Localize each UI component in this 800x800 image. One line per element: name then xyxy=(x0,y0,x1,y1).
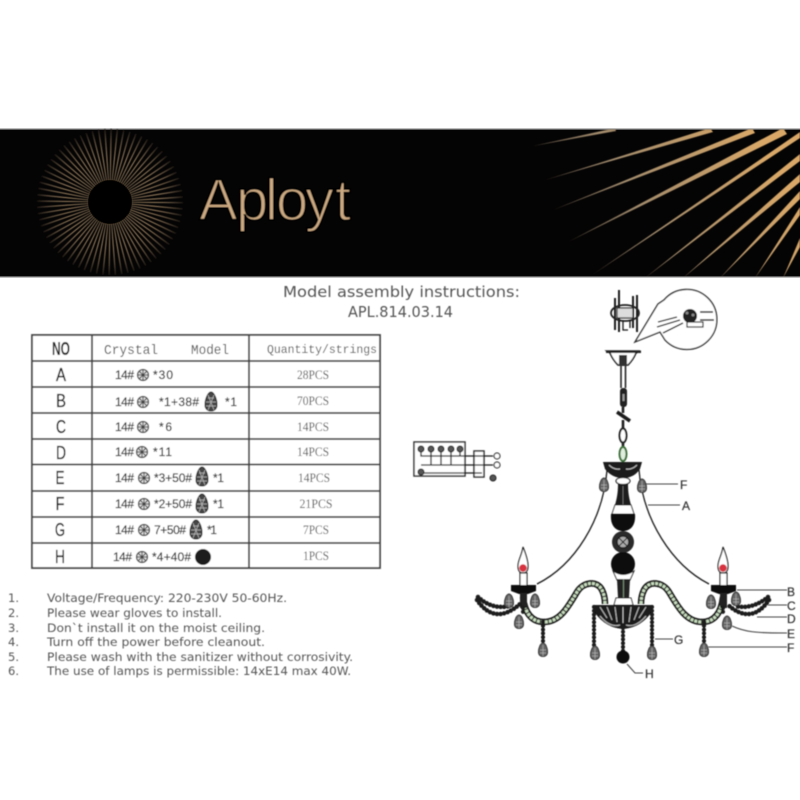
instructions list: Please wash with the sanitizer without corrosivity. xyxy=(47,650,353,664)
table header: Model xyxy=(191,343,229,359)
row G xyxy=(55,520,329,540)
row C xyxy=(56,417,329,437)
central column xyxy=(603,462,642,605)
heading: model assembly instructions: APL.814.03.14 xyxy=(348,303,453,321)
part callouts: B xyxy=(787,585,795,599)
instructions list: Voltage/Frequency: 220-230V 50-60Hz. xyxy=(47,591,287,605)
row G: G xyxy=(55,520,65,540)
heading: model assembly instructions: Model assembly instructions: xyxy=(283,283,520,301)
row H: H xyxy=(55,547,65,567)
bowl xyxy=(593,605,653,629)
glass arms xyxy=(523,583,723,622)
row G: 7+50# xyxy=(154,523,186,537)
crystal table xyxy=(32,335,380,568)
instructions list: 3. xyxy=(8,621,19,635)
row C: 14# xyxy=(115,420,134,434)
ball H xyxy=(616,650,630,664)
instructions list: 1. xyxy=(8,591,19,605)
row H xyxy=(55,547,329,567)
row F: *1 xyxy=(213,497,224,511)
instructions list: Don`t install it on the moist ceiling. xyxy=(47,621,265,635)
icon: golden sunburst logo xyxy=(63,155,157,249)
instructions list: 2. xyxy=(8,606,19,620)
row D: *11 xyxy=(153,445,172,459)
instructions list: Please wear gloves to install. xyxy=(47,606,222,620)
row A: *30 xyxy=(153,368,173,382)
row H: 14# xyxy=(113,550,132,564)
part callouts: E xyxy=(787,627,795,641)
part callouts: A xyxy=(682,499,690,513)
row A: 14# xyxy=(115,368,134,382)
row B: 14# xyxy=(115,395,134,409)
mounting detail inset xyxy=(611,289,717,349)
crystal drops xyxy=(504,478,740,660)
row E: *1 xyxy=(213,471,224,485)
part callouts: C xyxy=(787,599,796,613)
bead swags xyxy=(477,597,769,614)
row G: 7PCS xyxy=(303,523,329,537)
row D: D xyxy=(56,443,66,463)
support rods xyxy=(537,470,709,584)
instructions list: Turn off the power before cleanout. xyxy=(46,635,265,649)
instructions list: 6. xyxy=(8,664,19,678)
part callouts xyxy=(627,478,796,681)
heading: model assembly instructions xyxy=(283,283,520,321)
table header: Crystal xyxy=(104,343,158,359)
row C: C xyxy=(56,417,66,437)
right candle xyxy=(711,547,736,608)
row B: *1+38# xyxy=(159,395,199,409)
magnifier bubble xyxy=(635,289,717,349)
bead strands xyxy=(523,607,723,652)
row F: 14# xyxy=(115,497,134,511)
row F xyxy=(56,494,333,514)
row D xyxy=(56,443,329,463)
table header xyxy=(52,339,377,359)
row B: 70PCS xyxy=(297,394,329,408)
part callouts: F xyxy=(787,641,794,655)
row E: E xyxy=(56,468,64,488)
ceiling cup and chain xyxy=(606,350,641,463)
chandelier drawing xyxy=(477,350,769,664)
wiring diagram xyxy=(414,442,500,481)
row G: 14# xyxy=(115,523,134,537)
row E xyxy=(56,467,330,488)
row H: *4+40# xyxy=(152,550,191,564)
brand name: Aployt xyxy=(199,168,351,233)
part callouts: D xyxy=(787,612,796,626)
row H: 1PCS xyxy=(303,549,329,563)
part callouts: H xyxy=(645,667,654,681)
row F: 21PCS xyxy=(300,497,333,511)
decorative golden rays xyxy=(533,128,800,278)
row E: *3+50# xyxy=(154,471,192,485)
row F: *2+50# xyxy=(154,497,192,511)
table header: NO xyxy=(52,339,70,359)
left candle xyxy=(511,547,536,608)
row B xyxy=(56,391,329,411)
black brand banner xyxy=(0,128,800,278)
row E: 14# xyxy=(115,471,134,485)
part callouts: F xyxy=(680,478,687,492)
row B: *1 xyxy=(225,395,237,409)
instructions list: The use of lamps is permissible: 14xE14 max 40W. xyxy=(46,664,351,678)
part callouts: G xyxy=(674,633,683,647)
row C: 14PCS xyxy=(297,420,329,434)
row A: 28PCS xyxy=(297,368,329,382)
row D: 14PCS xyxy=(297,445,329,459)
row D: 14# xyxy=(115,445,134,459)
row E: 14PCS xyxy=(298,471,330,485)
row C: *6 xyxy=(159,420,172,434)
instructions list: 5. xyxy=(8,650,19,664)
instructions list: 4. xyxy=(8,635,19,649)
table header: Quantity/strings xyxy=(267,343,377,357)
row A: A xyxy=(56,365,66,385)
row G: *1 xyxy=(207,523,217,537)
instructions list xyxy=(8,591,353,678)
row B: B xyxy=(56,391,66,411)
small chandelier mount xyxy=(611,290,639,332)
row A xyxy=(56,365,329,385)
row F: F xyxy=(56,494,64,514)
infographic canvas xyxy=(0,128,800,679)
